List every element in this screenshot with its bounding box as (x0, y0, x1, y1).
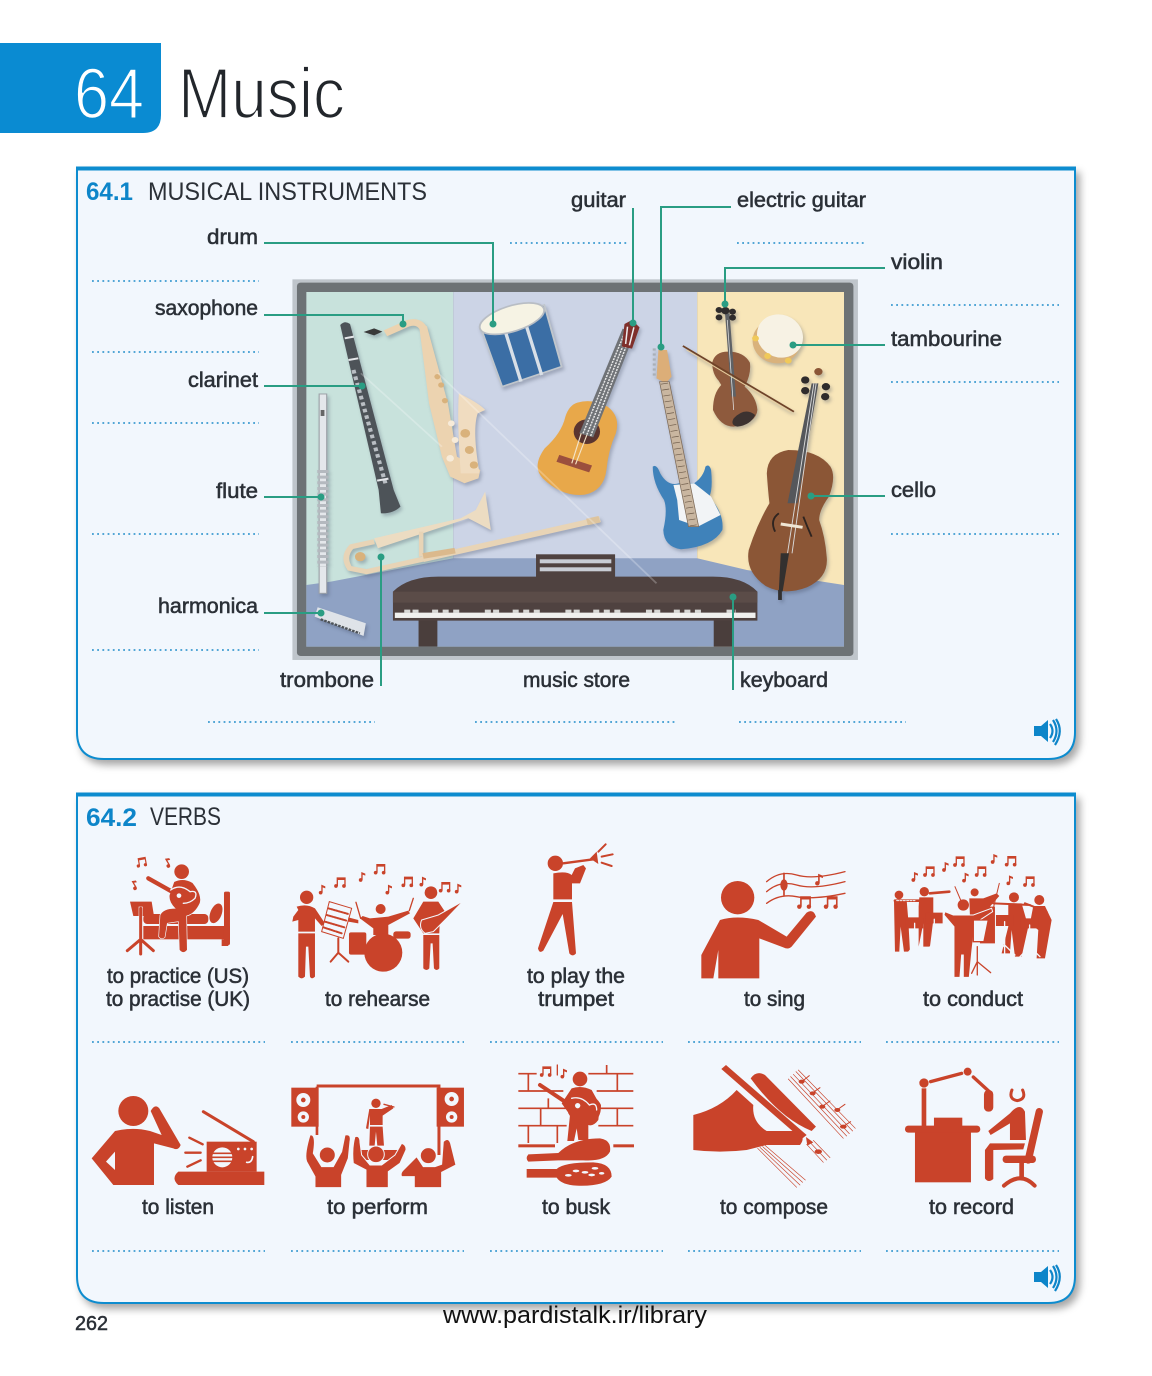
icon: practising guitar on bed (127, 857, 230, 954)
electric guitar (653, 348, 723, 549)
verb: to play the trumpet (490, 844, 663, 1042)
verb label: to play the (527, 965, 625, 988)
label: clarinet (92, 369, 366, 423)
label: drum (92, 226, 496, 328)
chapter title (0, 43, 345, 134)
chapter heading: Music (178, 55, 345, 134)
website url: www.pardistalk.ir/library (442, 1302, 707, 1329)
verb: to busk (490, 1065, 663, 1251)
flute (319, 394, 327, 593)
harmonica (315, 607, 366, 636)
label: flute: flute (216, 480, 258, 503)
guitar (538, 320, 640, 495)
verb: to sing (688, 872, 861, 1042)
label: cello (808, 479, 1059, 534)
icon: concert stage (291, 1086, 464, 1188)
section heading: VERBS (150, 803, 221, 831)
trombone (346, 492, 600, 572)
saxophone (364, 322, 485, 483)
label: violin (722, 251, 1059, 308)
clarinet (340, 322, 400, 513)
label: keyboard: keyboard (740, 669, 828, 692)
label: guitar (510, 189, 636, 326)
chapter number tab: 64 (74, 55, 144, 134)
cello (748, 368, 833, 600)
page number: 262 (75, 1313, 108, 1335)
label: tambourine: tambourine (891, 328, 1002, 351)
panel: verbs (76, 792, 1076, 1303)
icon: band rehearsing (292, 864, 463, 978)
verb label: to compose (720, 1196, 828, 1219)
icon: busker with guitar cases (518, 1065, 634, 1186)
label: clarinet: clarinet (188, 369, 258, 392)
verb label: to sing (744, 988, 805, 1011)
verb: to practice (92, 857, 265, 1042)
verb: to record (886, 1068, 1059, 1251)
section heading: 64.1 (86, 178, 133, 206)
label: harmonica (92, 595, 324, 650)
verb label (106, 965, 250, 1011)
label: flute (92, 480, 324, 534)
verb label (527, 965, 625, 1011)
section heading: MUSICAL INSTRUMENTS (148, 178, 427, 206)
icon: audio speaker (1034, 1265, 1060, 1291)
label: music store: music store (523, 669, 630, 692)
icon: listening to radio (92, 1096, 264, 1185)
verb label: to practice (US) (107, 965, 249, 988)
label: tambourine (790, 328, 1059, 382)
verb label: to rehearse (325, 988, 430, 1011)
verb: to listen (92, 1096, 265, 1251)
label: harmonica: harmonica (158, 595, 258, 618)
verb: to conduct (886, 854, 1059, 1042)
verb label: to listen (142, 1196, 214, 1219)
label: guitar: guitar (571, 189, 626, 212)
section heading (86, 803, 221, 832)
illustration: music store (292, 279, 858, 660)
keyboard (393, 554, 757, 647)
label: trombone (208, 554, 384, 722)
verb: to perform (291, 1086, 464, 1251)
label: violin: violin (891, 251, 943, 274)
icon: trumpet player (538, 844, 613, 955)
violin (683, 307, 794, 427)
section heading: 64.2 (86, 804, 137, 832)
label: trombone: trombone (280, 669, 374, 692)
label: electric guitar: electric guitar (737, 189, 866, 212)
verb label: to practise (UK) (106, 988, 250, 1011)
icon: audio speaker (1034, 719, 1060, 745)
icon: conductor and orchestra (894, 854, 1052, 977)
verb label: to conduct (923, 988, 1023, 1011)
verb label: trumpet (538, 988, 614, 1011)
chapter number tab (0, 43, 161, 134)
label: saxophone (92, 297, 406, 352)
verb label: to busk (542, 1196, 610, 1219)
verb: to rehearse (291, 864, 464, 1042)
tambourine (745, 308, 811, 370)
verb label: to record (929, 1196, 1014, 1219)
label: electric guitar (658, 189, 867, 350)
icon: recording at a desk (905, 1068, 1039, 1186)
icon: hand writing music (693, 1065, 855, 1187)
verb: to compose (688, 1065, 861, 1251)
label: keyboard (730, 594, 906, 722)
drum (475, 297, 562, 387)
label: cello: cello (891, 479, 936, 502)
verb label: to perform (327, 1196, 428, 1219)
label: drum: drum (207, 226, 258, 249)
icon: singer with music staff (701, 872, 845, 978)
label: saxophone: saxophone (155, 297, 258, 320)
panel: musical instruments (76, 166, 1076, 759)
